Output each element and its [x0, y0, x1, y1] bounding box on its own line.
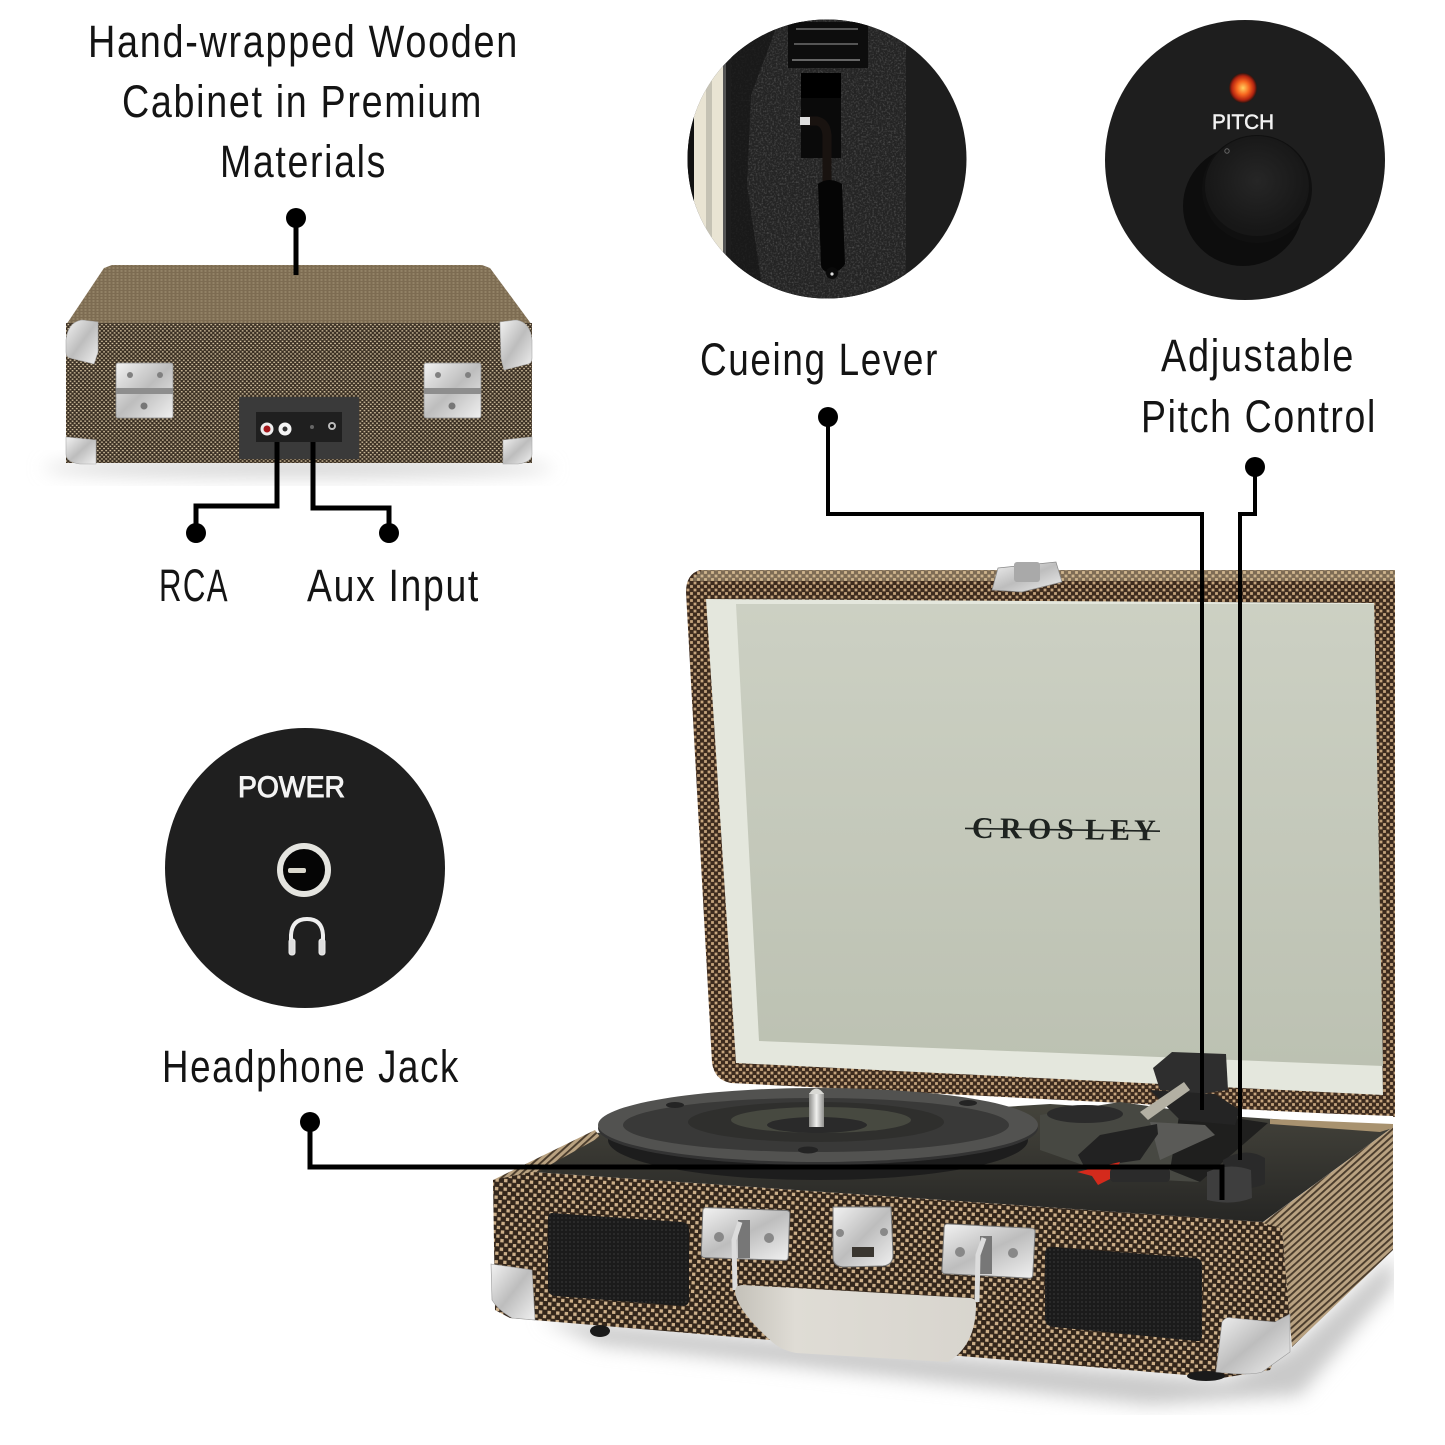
- pitch text: PITCH: [1212, 111, 1274, 134]
- LED: [1229, 73, 1257, 103]
- label: cueing lever: Cueing Lever: [700, 334, 939, 385]
- leader line: cabinet: [286, 208, 306, 275]
- power text: POWER: [238, 771, 345, 804]
- leader line: RCA: [186, 442, 277, 543]
- platter pads: [666, 1100, 977, 1154]
- cue button: [788, 22, 868, 68]
- lid latch: [992, 562, 1062, 592]
- panel: rear view of closed case: [43, 265, 553, 477]
- lever: [800, 117, 845, 279]
- label: adjustable pitch control: Pitch Control: [1141, 391, 1377, 442]
- speaker: left: [548, 1213, 689, 1306]
- front face: [493, 1172, 1290, 1378]
- hinge: right: [424, 363, 481, 418]
- right side face: [1262, 1127, 1393, 1347]
- leader line: cueing lever: [818, 407, 1202, 1110]
- rear connector panel: [239, 397, 359, 459]
- leader line: pitch control: [1240, 457, 1265, 1160]
- deck surface: [532, 1104, 1393, 1222]
- hinge: left: [116, 363, 173, 418]
- leader line: aux input: [313, 442, 399, 543]
- platter: [598, 1088, 1038, 1180]
- corner protectors: [66, 320, 532, 464]
- panel: turntable, lid open: [491, 562, 1395, 1405]
- label: RCA: RCA: [159, 560, 229, 611]
- heading: cabinet materials: [88, 16, 519, 187]
- heading: cabinet materials: Materials: [220, 136, 387, 187]
- label: headphone jack: Headphone Jack: [162, 1041, 460, 1092]
- circle: cueing lever detail: [680, 15, 970, 305]
- corners and feet: [491, 1264, 1290, 1381]
- spindle: [809, 1088, 824, 1127]
- circle: power and headphone detail: [165, 728, 445, 1008]
- headphone jack: [280, 846, 328, 894]
- icon: headphones: [289, 919, 325, 955]
- heading: cabinet materials: Cabinet in Premium: [122, 76, 483, 127]
- label: adjustable pitch control: [1141, 330, 1377, 442]
- logo: CROSLEY: [972, 812, 1156, 847]
- white gap below lid: [1020, 1102, 1393, 1124]
- label: aux input: Aux Input: [307, 560, 480, 611]
- heading: cabinet materials: Hand-wrapped Wooden: [88, 16, 519, 67]
- speaker: right: [1045, 1247, 1202, 1341]
- lid: [686, 562, 1395, 1117]
- leader line: headphone jack: [300, 1112, 1222, 1200]
- label: adjustable pitch control: Adjustable: [1161, 330, 1355, 381]
- circle: pitch control detail: [1105, 20, 1385, 300]
- tonearm: [1040, 1052, 1268, 1185]
- floor shadow: [540, 1255, 1393, 1405]
- latch plates and handle: [701, 1207, 1035, 1362]
- knobs: [1207, 1152, 1265, 1203]
- knob: [1183, 135, 1312, 266]
